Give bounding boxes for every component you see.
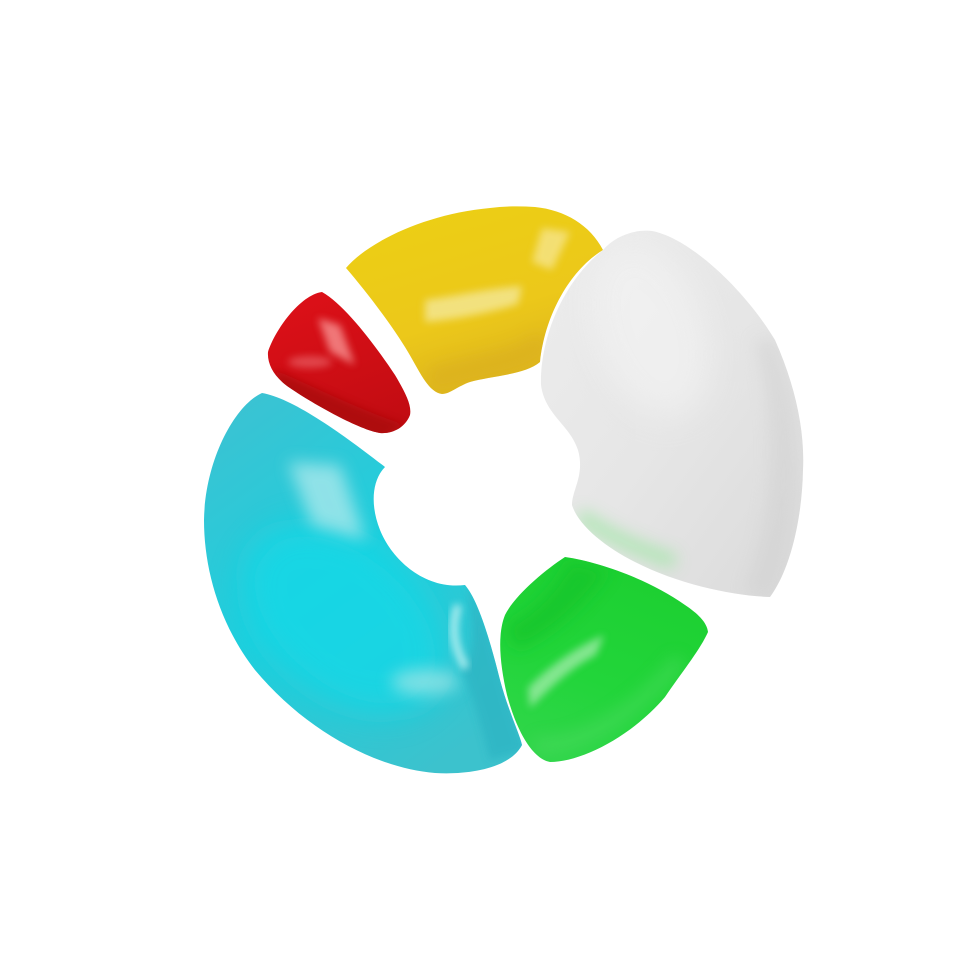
3D donut chart illustration [204, 206, 804, 774]
segment: green [500, 557, 708, 762]
segment: white [541, 227, 803, 600]
segment: yellow [346, 206, 603, 394]
segment: red [268, 292, 410, 440]
segment: cyan [204, 393, 525, 773]
